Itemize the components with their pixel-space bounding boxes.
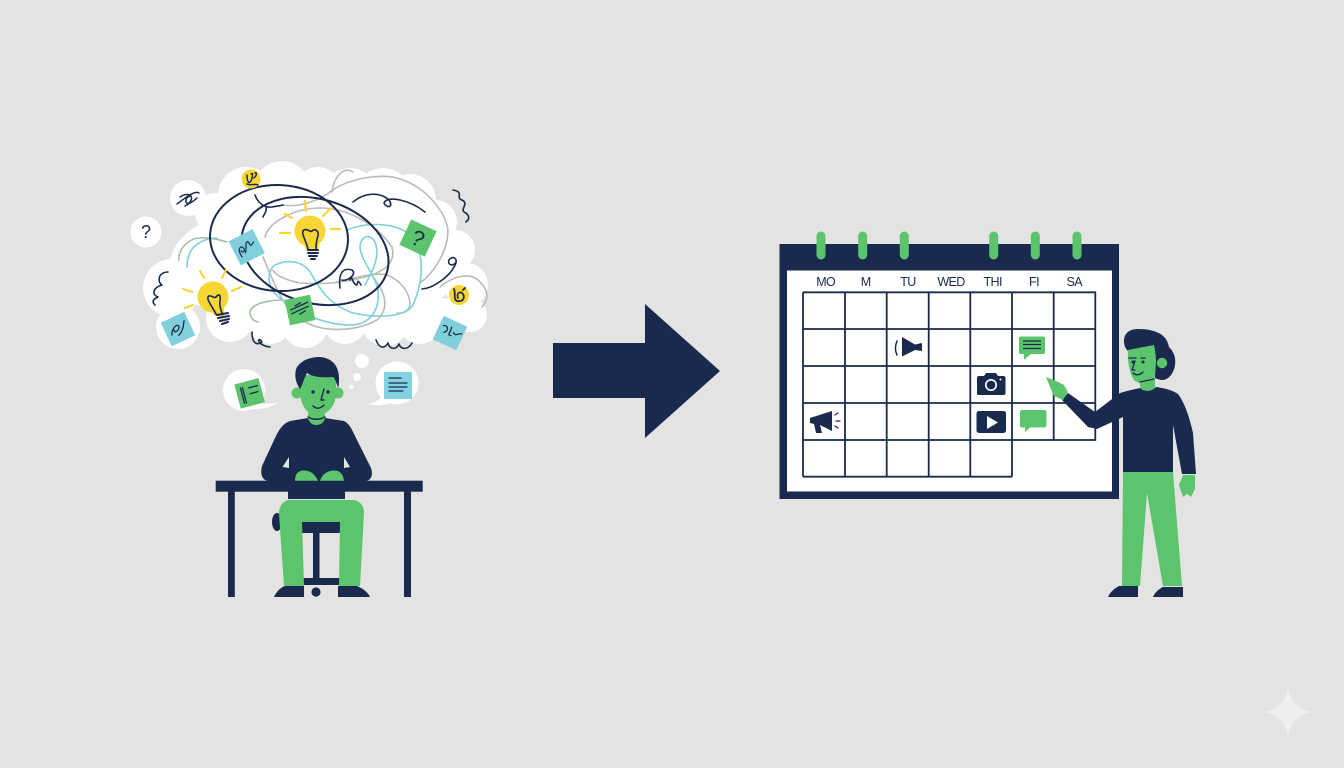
binder rings — [816, 232, 1082, 260]
arrow — [553, 304, 720, 438]
icon: green chat bubble — [1020, 410, 1046, 432]
navy loops — [207, 180, 401, 322]
panel: tangled idea cloud — [130, 161, 488, 350]
resting hand — [1179, 475, 1195, 497]
small yellow badge right — [449, 285, 469, 305]
pointing hand — [1046, 377, 1068, 400]
torso and arms — [261, 418, 372, 499]
face — [1128, 345, 1167, 383]
icon: video player — [976, 411, 1006, 433]
hands — [295, 470, 344, 481]
cloud shape — [130, 161, 488, 349]
neck — [308, 405, 325, 425]
trousers — [1122, 472, 1182, 586]
trousers — [279, 500, 364, 586]
icon: large light bulb — [280, 201, 340, 259]
sticky note: blue lower right — [433, 316, 467, 350]
calendar grid — [803, 292, 1095, 477]
gray tangle lines — [179, 170, 487, 329]
sticky note: green middle — [285, 295, 315, 325]
shoes — [274, 586, 370, 597]
arm gaps — [282, 457, 350, 468]
weekday labels: FI — [1029, 275, 1039, 289]
torso and pointing arm — [1062, 387, 1196, 474]
speech bubble: green note — [223, 369, 278, 411]
navy scribbles — [153, 190, 469, 348]
panel: person pointing at calendar — [1046, 329, 1196, 597]
stool — [272, 513, 340, 597]
question bubble: ? — [141, 222, 151, 242]
head — [292, 357, 344, 419]
sticky note: green question: ? — [407, 225, 429, 252]
calendar frame — [780, 244, 1119, 499]
icon: megaphone — [810, 411, 840, 433]
weekday labels: THI — [984, 275, 1002, 289]
panel: person thinking at desk — [216, 354, 423, 597]
icon: small light bulb — [183, 270, 241, 324]
icon: megaphone outline — [896, 337, 922, 356]
shoes — [1108, 586, 1183, 597]
weekday labels: SA — [1067, 275, 1083, 289]
weekday labels: M — [861, 275, 871, 289]
calendar page — [787, 270, 1112, 492]
sticky note: blue upper — [229, 229, 265, 265]
weekday labels: WED — [937, 275, 965, 289]
sticky note: green question — [399, 219, 437, 257]
small yellow badge top — [242, 170, 260, 188]
icon: sparkle watermark — [1264, 687, 1312, 737]
sticky note: blue lower left — [161, 312, 195, 346]
icon: camera — [977, 373, 1006, 395]
hair — [1124, 329, 1175, 380]
weekday labels: TU — [900, 275, 916, 289]
teal tangle lines — [187, 225, 421, 325]
scribble bubble — [177, 192, 199, 206]
weekday labels: MO — [816, 275, 836, 289]
weekday labels — [816, 275, 1083, 289]
speech bubble: blue note — [368, 362, 418, 405]
desk — [216, 481, 423, 597]
icon: green message — [1019, 336, 1045, 360]
thought dots — [349, 354, 369, 389]
neck — [1140, 378, 1155, 393]
panel: content calendar — [780, 232, 1119, 499]
